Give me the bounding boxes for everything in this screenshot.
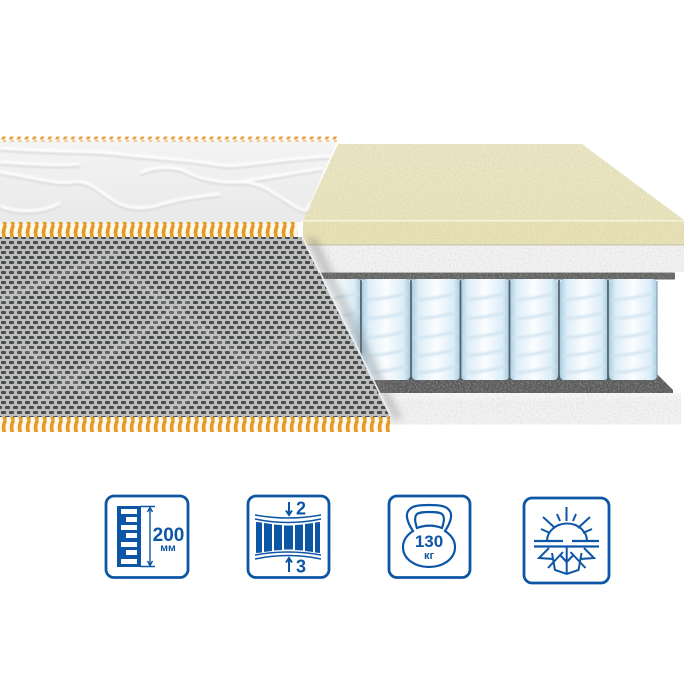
bottom curves bbox=[255, 552, 321, 559]
icon: firmness sides 2 and 3: 3 bbox=[296, 556, 306, 576]
height arrow bbox=[140, 506, 155, 566]
mesh edge highlight bbox=[303, 238, 391, 416]
up arrow bbox=[286, 558, 292, 572]
sun bbox=[547, 524, 587, 541]
sun rays bbox=[541, 507, 592, 533]
icon: summer and winter sides bbox=[524, 498, 609, 583]
quilted fabric bbox=[0, 141, 337, 222]
middle piping bbox=[0, 222, 298, 237]
pocket springs bbox=[312, 279, 657, 380]
mesh side fabric bbox=[0, 237, 390, 417]
cover shadow bbox=[306, 238, 402, 420]
spring block glyph bbox=[117, 506, 141, 567]
kettlebell outline bbox=[403, 505, 455, 567]
coil bands bbox=[315, 293, 655, 373]
horizon lines bbox=[534, 541, 599, 546]
spring bars bbox=[256, 522, 320, 553]
white foam upper bbox=[304, 246, 684, 272]
snowflake bbox=[539, 547, 594, 574]
top curves bbox=[255, 515, 321, 522]
icon: height 200 mm bbox=[106, 496, 188, 578]
foam layers bbox=[303, 144, 684, 272]
quilting wave highlights bbox=[0, 148, 330, 211]
icon: kettlebell 130 kg: 130 bbox=[415, 532, 443, 551]
white foam lower bbox=[300, 393, 681, 424]
icon: kettlebell 130 kg: кг bbox=[424, 550, 434, 562]
icon: height 200 mm: мм bbox=[160, 542, 176, 554]
icon: firmness sides 2 and 3 bbox=[248, 496, 329, 578]
lower dark felt bbox=[320, 374, 673, 393]
icon: kettlebell 130 kg bbox=[389, 496, 470, 578]
spring separators bbox=[361, 280, 657, 379]
icon: firmness sides 2 and 3: 2 bbox=[296, 498, 306, 518]
spring unit bbox=[310, 272, 675, 393]
height label: 200 bbox=[153, 525, 184, 546]
yellow foam front bbox=[303, 221, 684, 245]
quilting wave shadows bbox=[0, 150, 329, 213]
top piping bbox=[0, 136, 337, 142]
yellow foam top surface bbox=[303, 144, 684, 220]
bottom piping bbox=[0, 417, 390, 432]
down arrow bbox=[286, 502, 292, 515]
quilted cover bbox=[0, 136, 337, 222]
upper dark felt bbox=[310, 272, 675, 280]
mesh light patches bbox=[0, 250, 300, 410]
